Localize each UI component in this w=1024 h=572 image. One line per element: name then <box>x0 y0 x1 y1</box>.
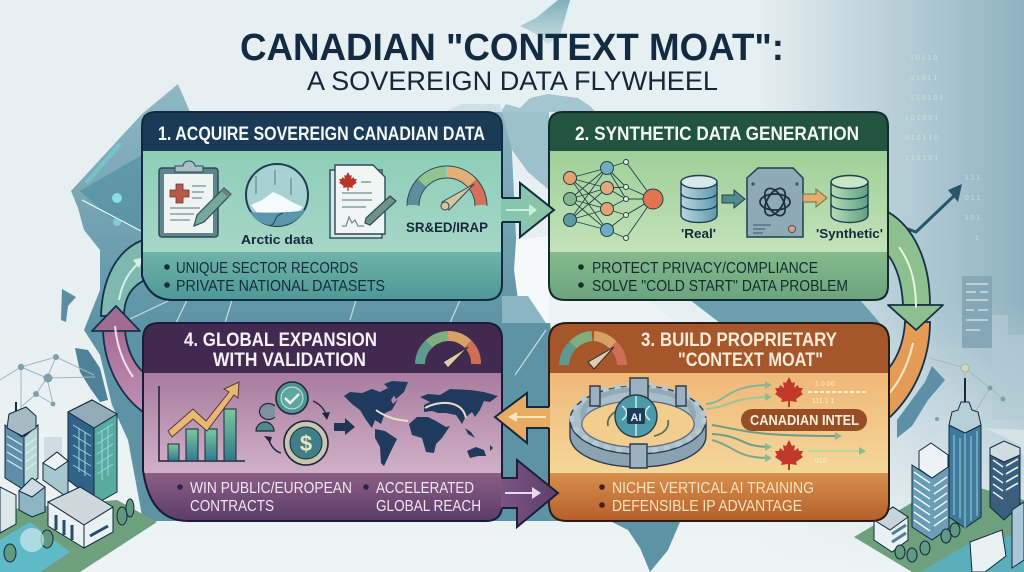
title <box>240 27 784 96</box>
bullets 2: SOLVE "COLD START" DATA PROBLEM <box>592 278 848 295</box>
panel 1: acquire sovereign Canadian data <box>142 112 502 300</box>
binary data column backdrop: 1 1 0 1 0 1 <box>910 95 943 102</box>
left city skyline <box>0 354 157 572</box>
icon: validation and funding cycle <box>256 382 330 465</box>
binary data column backdrop: 1 0 1 0 0 1 <box>905 115 938 122</box>
bullets 3 <box>599 480 814 515</box>
bullets 4: WIN PUBLIC/EUROPEAN <box>190 480 352 497</box>
binary data column backdrop: 1 0 1 1 0 <box>910 55 937 62</box>
icon: synthetic database <box>831 176 868 222</box>
icon: real database <box>681 176 717 222</box>
data streams <box>706 385 866 458</box>
icon: SR&ED gauge <box>407 166 487 210</box>
heading 4 <box>184 330 377 371</box>
rising trend arrow <box>905 184 962 232</box>
icon: world map <box>344 381 498 466</box>
label: synthetic: 'Synthetic' <box>816 226 883 241</box>
arrow: step 3 to step 4 <box>495 393 550 443</box>
icon: header gauge <box>420 336 476 368</box>
binary data column backdrop: 1 0 1 <box>965 215 981 222</box>
heading 2: 2. SYNTHETIC DATA GENERATION <box>575 124 859 145</box>
icon: medical clipboard <box>159 161 231 237</box>
icon: neural network <box>564 160 663 240</box>
label: real: 'Real' <box>681 226 716 241</box>
binary data column backdrop <box>905 55 981 242</box>
heading 3: "CONTEXT MOAT" <box>678 350 823 371</box>
arrow: real to server <box>722 190 745 208</box>
bullets 1 <box>164 260 385 295</box>
icon: maple leaf bottom <box>775 440 803 470</box>
binary data column backdrop: 1 1 0 1 0 1 <box>905 155 938 162</box>
label: Canadian Intel <box>741 409 867 431</box>
binary labels: 1 0 00 <box>815 381 835 388</box>
panel 2: synthetic data generation <box>549 112 889 300</box>
heading 1: 1. ACQUIRE SOVEREIGN CANADIAN DATA <box>158 124 485 145</box>
arrow: step 2 to step 3 <box>873 212 943 418</box>
binary data column backdrop: 0 1 0 1 1 <box>910 75 937 82</box>
binary data column backdrop: 0 1 1 <box>965 195 981 202</box>
arrow: cycle to world map <box>334 418 355 435</box>
title: CANADIAN "CONTEXT MOAT": <box>240 27 784 69</box>
panel 4: global expansion with validation <box>143 323 503 521</box>
icon: server with knot logo <box>747 168 803 237</box>
bullets 4 <box>177 480 481 515</box>
binary data column backdrop: 1 1 1 <box>965 175 981 182</box>
icon: maple leaf top <box>775 377 803 407</box>
binary data column backdrop: 0 1 0 1 1 0 <box>905 135 938 142</box>
icon: arctic data globe <box>246 164 308 226</box>
heading 4: 4. GLOBAL EXPANSION <box>184 330 377 351</box>
icon: header gauge <box>564 336 622 369</box>
binary labels <box>812 381 835 465</box>
arrow: step 1 to step 2 <box>501 183 554 237</box>
arrow: step 4 to step 1 <box>92 240 144 412</box>
heading 3: 3. BUILD PROPRIETARY <box>641 330 837 351</box>
flow arcs on world map <box>376 403 466 421</box>
right hazy skyline <box>932 240 1024 420</box>
bullets 4: GLOBAL REACH <box>376 498 481 515</box>
icon: castle moat with AI brain: AI <box>630 412 642 424</box>
label: Canadian Intel: CANADIAN INTEL <box>750 412 859 429</box>
right city skyline <box>854 358 1024 572</box>
bullets 1: PRIVATE NATIONAL DATASETS <box>176 278 385 295</box>
stream arrowheads <box>765 381 866 462</box>
icon: Canadian document <box>330 165 396 238</box>
icon: validation and funding cycle: $ <box>300 431 312 456</box>
panel 3: build proprietary context moat <box>549 323 889 521</box>
bullets 3: DEFENSIBLE IP ADVANTAGE <box>612 498 802 515</box>
bullets 2: PROTECT PRIVACY/COMPLIANCE <box>592 260 818 277</box>
binary labels: 010 <box>815 458 827 465</box>
bullets 1: UNIQUE SECTOR RECORDS <box>176 260 358 277</box>
title: A SOVEREIGN DATA FLYWHEEL <box>307 66 718 96</box>
binary labels: 111 1 1 <box>812 398 834 405</box>
bullets 3: NICHE VERTICAL AI TRAINING <box>612 480 814 497</box>
bullets 2 <box>578 260 848 295</box>
bullets 4: ACCELERATED <box>376 480 474 497</box>
heading 4: WITH VALIDATION <box>213 350 366 371</box>
icon: growth bar chart <box>159 382 245 461</box>
bullets 4: CONTRACTS <box>190 498 274 515</box>
label: arctic data: Arctic data <box>241 232 314 247</box>
heading 3 <box>641 330 837 371</box>
binary data column backdrop: 1 <box>975 235 979 242</box>
label: SR&ED/IRAP: SR&ED/IRAP <box>406 219 488 235</box>
arrow: step 4 to step 3 <box>501 460 558 527</box>
arrow: server to synthetic <box>803 189 827 207</box>
icon: castle moat with AI brain <box>570 378 706 468</box>
